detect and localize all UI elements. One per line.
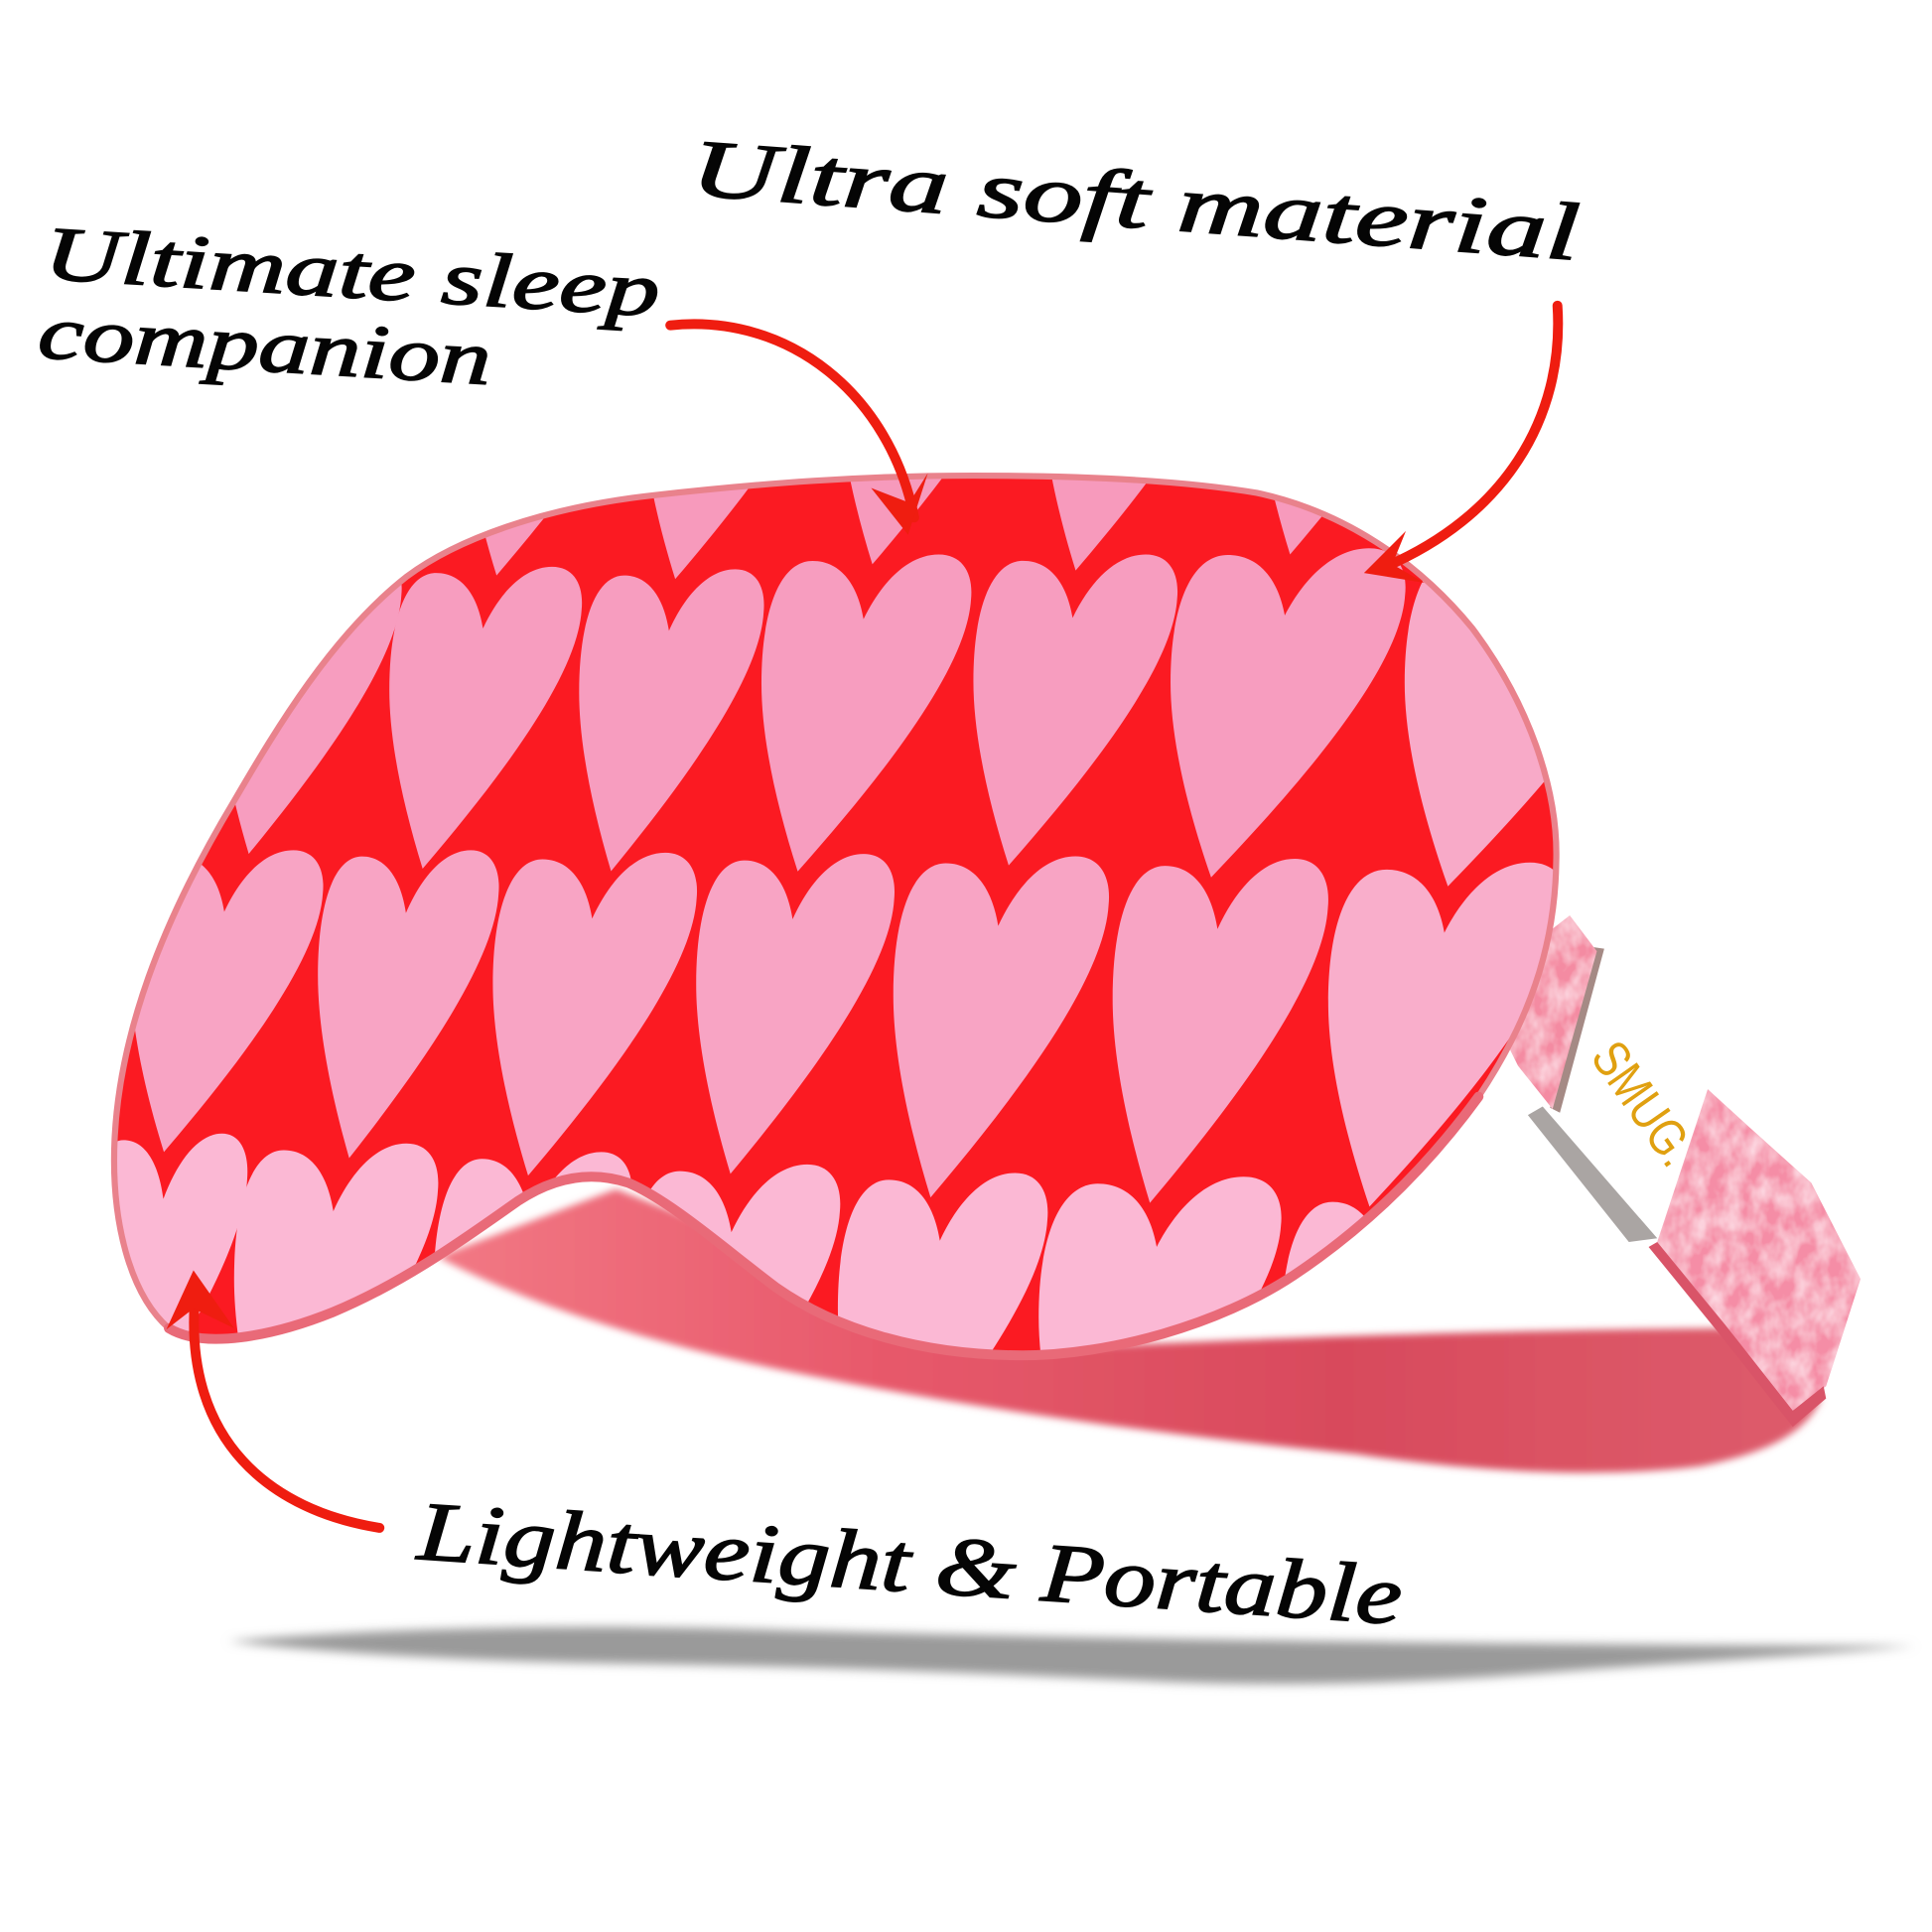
arrow: lightweight and portable xyxy=(167,1271,379,1528)
arrow head xyxy=(1364,531,1425,583)
strap underside edge xyxy=(1649,1242,1826,1427)
infographic canvas xyxy=(40,141,1904,1691)
mask piping rim xyxy=(114,476,1557,1355)
label side edge xyxy=(1528,1106,1657,1242)
heart pattern third row xyxy=(131,850,1567,1206)
brand name: SMUG. xyxy=(1580,1031,1706,1177)
white strap label xyxy=(1528,949,1708,1242)
heart pattern second row xyxy=(235,548,1544,887)
second line: companion xyxy=(36,289,493,401)
front strap near mask xyxy=(1478,915,1596,1109)
lower piping xyxy=(169,1097,1478,1355)
heart pattern top row xyxy=(485,479,1322,580)
arrow: ultimate sleep companion xyxy=(670,324,928,535)
heart pattern bottom row xyxy=(117,1134,1364,1350)
pink strap loop xyxy=(1657,1089,1861,1411)
label top fold xyxy=(1550,946,1604,1113)
arrow head xyxy=(167,1271,234,1329)
sleep mask xyxy=(111,473,1560,1360)
arrow head xyxy=(871,474,928,535)
mask fabric xyxy=(117,479,1553,1350)
heading: ultimate sleep companion xyxy=(36,210,662,401)
first line: Ultimate sleep xyxy=(42,210,662,333)
back strap xyxy=(438,1189,1821,1472)
heading: ultra soft material: Ultra soft material xyxy=(689,122,1583,278)
heading: lightweight and portable: Lightweight & Portable xyxy=(414,1485,1405,1643)
arrow: ultra soft material xyxy=(1364,306,1558,583)
ground shadow xyxy=(228,1627,1916,1684)
